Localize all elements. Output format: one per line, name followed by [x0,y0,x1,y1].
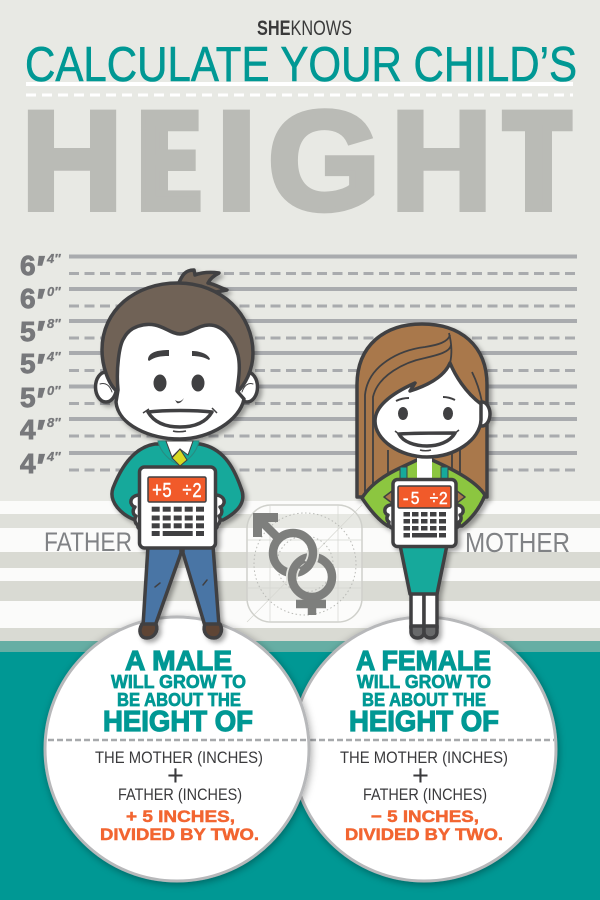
height scale labels: 6 [20,283,36,314]
subheading: be about the: BE ABOUT THE [362,689,486,710]
girl straps [400,467,448,479]
label: MOTHER: MOTHER [465,527,570,558]
height scale labels: 8″ [47,415,61,430]
heading: HEIGHT: E [136,82,202,239]
text: plus: + [412,760,429,792]
left circle: male formula [45,617,309,881]
right circle: female formula [292,617,556,881]
boy calculator [140,467,216,548]
boy ears [96,372,258,402]
heading: HEIGHT [22,82,571,240]
boy collar and tie [158,441,199,466]
height scale labels: ′ [35,382,45,420]
heading: HEIGHT: I [216,83,256,240]
character: girl [357,324,490,638]
height scale labels: ′ [35,414,45,452]
girl hair back [357,324,487,497]
boy smile [148,410,212,427]
height scale labels: 5 [20,348,36,379]
boy shoes [140,624,221,638]
heading: a male: A MALE [125,645,232,676]
height scale labels: 4″ [46,251,61,266]
text: plus: + [167,760,184,792]
heading: HEIGHT: T [503,82,571,239]
height scale labels: 4 [20,448,36,479]
girl hair strands [365,333,482,497]
girl arm gaps [384,491,465,503]
height scale labels: ′ [35,315,45,353]
girl legs [411,592,437,628]
boy face [116,324,244,439]
icon part: male symbol [253,513,313,573]
boy legs [143,546,219,626]
text: the mother inches: THE MOTHER (INCHES) [340,749,508,767]
heading: a female: A FEMALE [356,645,491,676]
text: divided by two: DIVIDED BY TWO. [100,825,259,844]
label: FATHER: FATHER [44,527,132,557]
calculator display: -5 ÷2 [401,489,448,510]
icon: gender symbols [247,505,362,622]
height scale labels: 5 [20,316,36,347]
height scale labels: 4 [20,414,36,445]
height scale labels [20,250,61,486]
subheading: will grow to: WILL GROW TO [111,671,246,692]
height scale labels: 8″ [47,316,61,331]
boy sweater [112,444,243,520]
girl neck [417,452,432,480]
heading: HEIGHT: H [22,82,123,239]
calculator display: +5 ÷2 [152,481,202,504]
text: father inches: FATHER (INCHES) [118,786,242,804]
heading: HEIGHT: G [268,83,380,240]
height scale labels: ′ [35,448,45,486]
calculator keys [152,507,204,536]
calculator keys [404,512,446,538]
girl skirt [400,545,447,594]
text: plus five inches: + 5 INCHES, [126,807,235,826]
text: the mother inches: THE MOTHER (INCHES) [95,749,263,767]
girl shoes [411,626,437,638]
boy brows [148,350,210,361]
height scale labels: 6 [20,250,36,281]
girl eyes [398,407,453,420]
subheading: will grow to: WILL GROW TO [357,671,491,692]
height scale labels: ′ [35,283,45,321]
girl face [375,363,481,457]
girl hands [385,505,463,528]
height scale labels: 0″ [47,284,61,299]
boy eyes [154,374,204,392]
text: father inches: FATHER (INCHES) [363,786,487,804]
subheading: be about the: BE ABOUT THE [117,689,241,710]
girl calculator [393,480,456,546]
text: minus five inches: − 5 INCHES, [371,807,479,826]
boy hands [131,495,224,529]
text: divided by two: DIVIDED BY TWO. [345,825,503,844]
girl ear [474,402,490,426]
boy nose [175,398,184,403]
icon part: female symbol [292,545,332,615]
height scale labels: ′ [35,250,45,288]
heading: HEIGHT: H [391,82,492,239]
character: boy [96,270,258,638]
heading: height of: HEIGHT OF [349,706,499,738]
height scale labels: 0″ [47,383,61,398]
boy hair [102,270,253,392]
height scale labels: 4″ [46,449,61,464]
girl sweater [362,460,485,526]
girl smile [399,433,455,446]
height scale labels: 4″ [46,349,61,364]
girl brows [396,397,455,401]
height scale labels: 5 [20,382,36,413]
heading: height of: HEIGHT OF [103,706,253,738]
logo: SheKnows: SHEKNOWS [257,17,352,40]
height scale labels: ′ [35,348,45,386]
